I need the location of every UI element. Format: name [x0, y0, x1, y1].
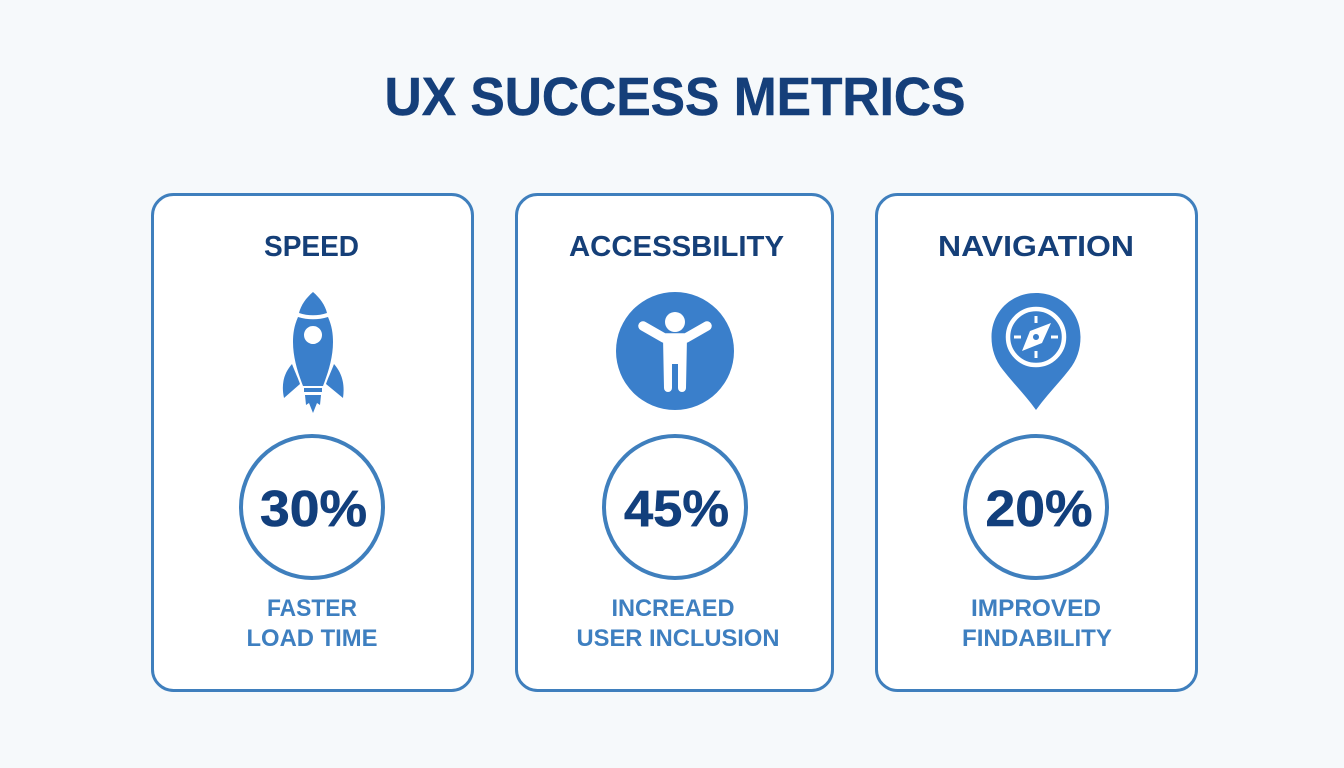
metric circle: 30%: [241, 436, 383, 578]
panel: speed: [152, 194, 472, 690]
metric circle: 45%: [604, 436, 746, 578]
metric circle: 20%: [965, 436, 1107, 578]
title: UX SUCCESS METRICS: [384, 67, 966, 127]
label: faster load time: FASTER: [267, 595, 357, 622]
label: faster load time: [246, 595, 378, 652]
label: increaed user inclusion: [576, 595, 780, 652]
metric circle: 45%: 45%: [624, 480, 729, 537]
icon: person in circle: [616, 292, 734, 410]
panel: navigation: [876, 194, 1196, 690]
label: faster load time: LOAD TIME: [246, 625, 378, 652]
metric circle: 20%: 20%: [986, 480, 1092, 537]
label: improved findability: FINDABILITY: [962, 625, 1112, 652]
label: increaed user inclusion: USER INCLUSION: [576, 625, 780, 652]
heading: accessibility: ACCESSBILITY: [569, 231, 784, 263]
metric circle: 30%: 30%: [260, 480, 367, 537]
label: increaed user inclusion: INCREAED: [612, 595, 734, 622]
label: improved findability: IMPROVED: [971, 595, 1101, 622]
label: improved findability: [962, 595, 1112, 652]
icon: compass map pin: [992, 293, 1080, 410]
heading: speed: SPEED: [264, 231, 359, 263]
heading: navigation: NAVIGATION: [938, 231, 1134, 263]
panel: accessibility: [516, 194, 832, 690]
icon: rocket: [283, 292, 344, 413]
